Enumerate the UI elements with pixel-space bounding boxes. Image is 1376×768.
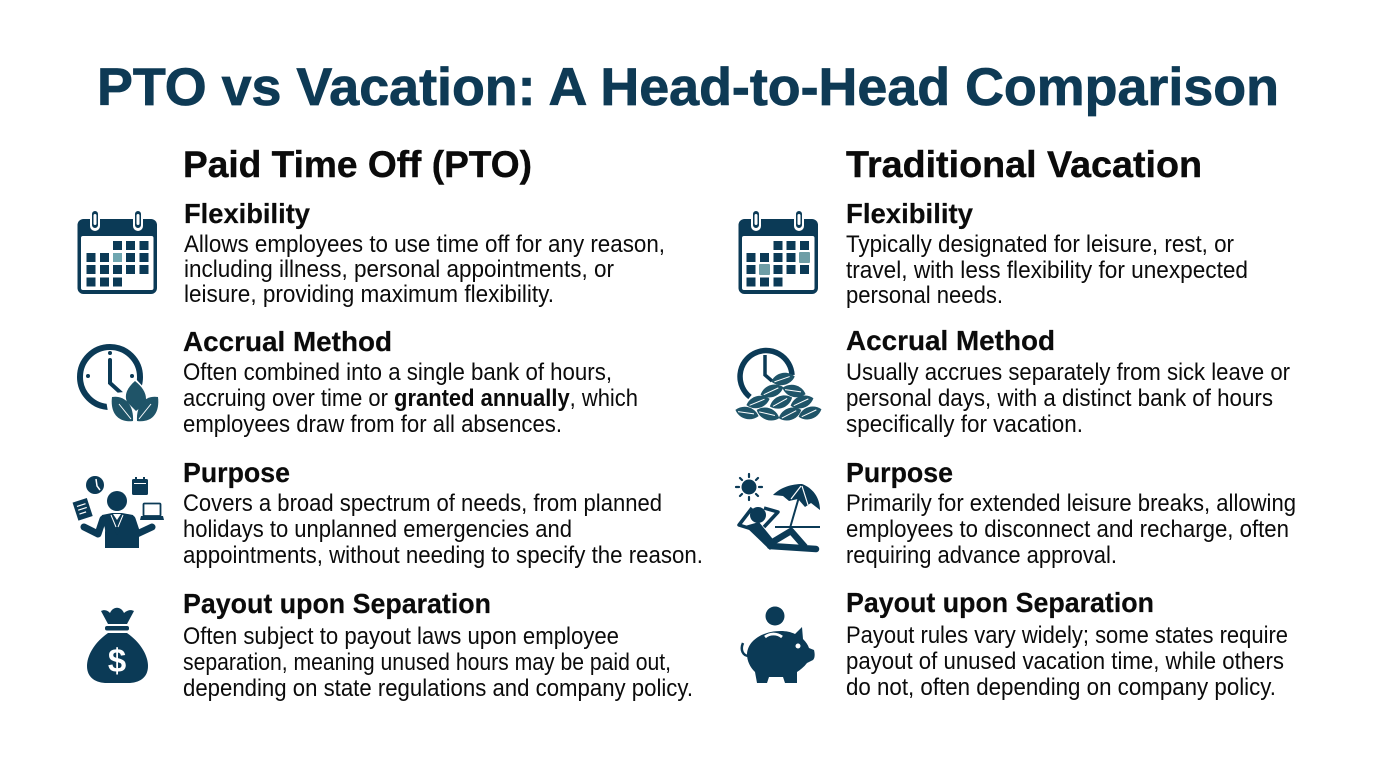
item: flexibility xyxy=(184,198,665,308)
item: accrual method xyxy=(846,325,1290,438)
icon: juggling businessperson xyxy=(73,476,164,548)
item: payout upon separation: depending on state regulations and company policy. xyxy=(183,675,693,702)
item: purpose: employees to disconnect and recharge, often xyxy=(846,516,1289,543)
item: purpose xyxy=(846,457,1296,569)
title: PTO vs Vacation: A Head-to-Head Comparison xyxy=(97,58,1279,117)
item: accrual method: accruing over time or granted annually, which xyxy=(183,385,638,412)
item: flexibility: personal needs. xyxy=(846,282,1003,309)
item: purpose: holidays to unplanned emergencies and xyxy=(183,516,572,543)
item: payout upon separation: payout of unused vacation time, while others xyxy=(846,648,1284,675)
icon: person relaxing on beach xyxy=(736,474,820,550)
item: flexibility xyxy=(846,198,1248,309)
item: payout upon separation: Often subject to payout laws upon employee xyxy=(183,623,619,650)
item: payout upon separation: Payout rules vary widely; some states require xyxy=(846,622,1288,649)
item: payout upon separation xyxy=(846,587,1288,701)
item: flexibility: travel, with less flexibility for unexpected xyxy=(846,257,1248,284)
icon: clock with leaves xyxy=(80,347,162,424)
item: payout upon separation: Payout upon Separation xyxy=(846,587,1154,618)
item: payout upon separation: do not, often depending on company policy. xyxy=(846,674,1276,701)
heading: Traditional Vacation: Traditional Vacation xyxy=(846,144,1202,185)
item: purpose: Purpose xyxy=(183,457,290,488)
item: flexibility: Typically designated for leisure, rest, or xyxy=(846,231,1234,258)
icon: piggy bank with coin xyxy=(742,606,815,683)
item: payout upon separation xyxy=(183,588,693,702)
item: payout upon separation: Payout upon Separation xyxy=(183,588,491,619)
item: purpose: Purpose xyxy=(846,457,953,488)
item: purpose: Primarily for extended leisure breaks, allowing xyxy=(846,490,1296,517)
item: flexibility: including illness, personal appointments, or xyxy=(184,256,614,283)
item: accrual method xyxy=(183,326,638,438)
icon: money bag: $ xyxy=(108,642,126,679)
item: flexibility: leisure, providing maximum flexibility. xyxy=(184,281,554,308)
item: accrual method: Accrual Method xyxy=(846,325,1055,356)
icon: clock with leaf pile xyxy=(734,351,823,424)
icon: money bag xyxy=(87,608,148,683)
item: accrual method: employees draw from for all absences. xyxy=(183,411,562,438)
item: accrual method: Accrual Method xyxy=(183,326,392,357)
icon: calendar with two teal days xyxy=(738,211,818,294)
item: purpose: requiring advance approval. xyxy=(846,542,1117,569)
item: purpose xyxy=(183,457,703,569)
item: accrual method: Usually accrues separately from sick leave or xyxy=(846,359,1290,386)
item: purpose: Covers a broad spectrum of needs, from planned xyxy=(183,490,662,517)
item: accrual method: personal days, with a distinct bank of hours xyxy=(846,385,1273,412)
item: accrual method: specifically for vacation. xyxy=(846,411,1083,438)
item: accrual method: Often combined into a single bank of hours, xyxy=(183,359,612,386)
heading: Paid Time Off: Paid Time Off (PTO) xyxy=(183,144,532,185)
item: flexibility: Flexibility xyxy=(846,198,973,229)
icon: calendar with teal day xyxy=(78,211,157,294)
panel: paid time off column xyxy=(73,144,703,702)
item: purpose: appointments, without needing to specify the reason. xyxy=(183,542,703,569)
item: flexibility: Allows employees to use time off for any reason, xyxy=(184,231,665,258)
item: payout upon separation: separation, meaning unused hours may be paid out, xyxy=(183,649,671,676)
item: flexibility: Flexibility xyxy=(184,198,310,229)
panel: traditional vacation column xyxy=(734,144,1296,701)
